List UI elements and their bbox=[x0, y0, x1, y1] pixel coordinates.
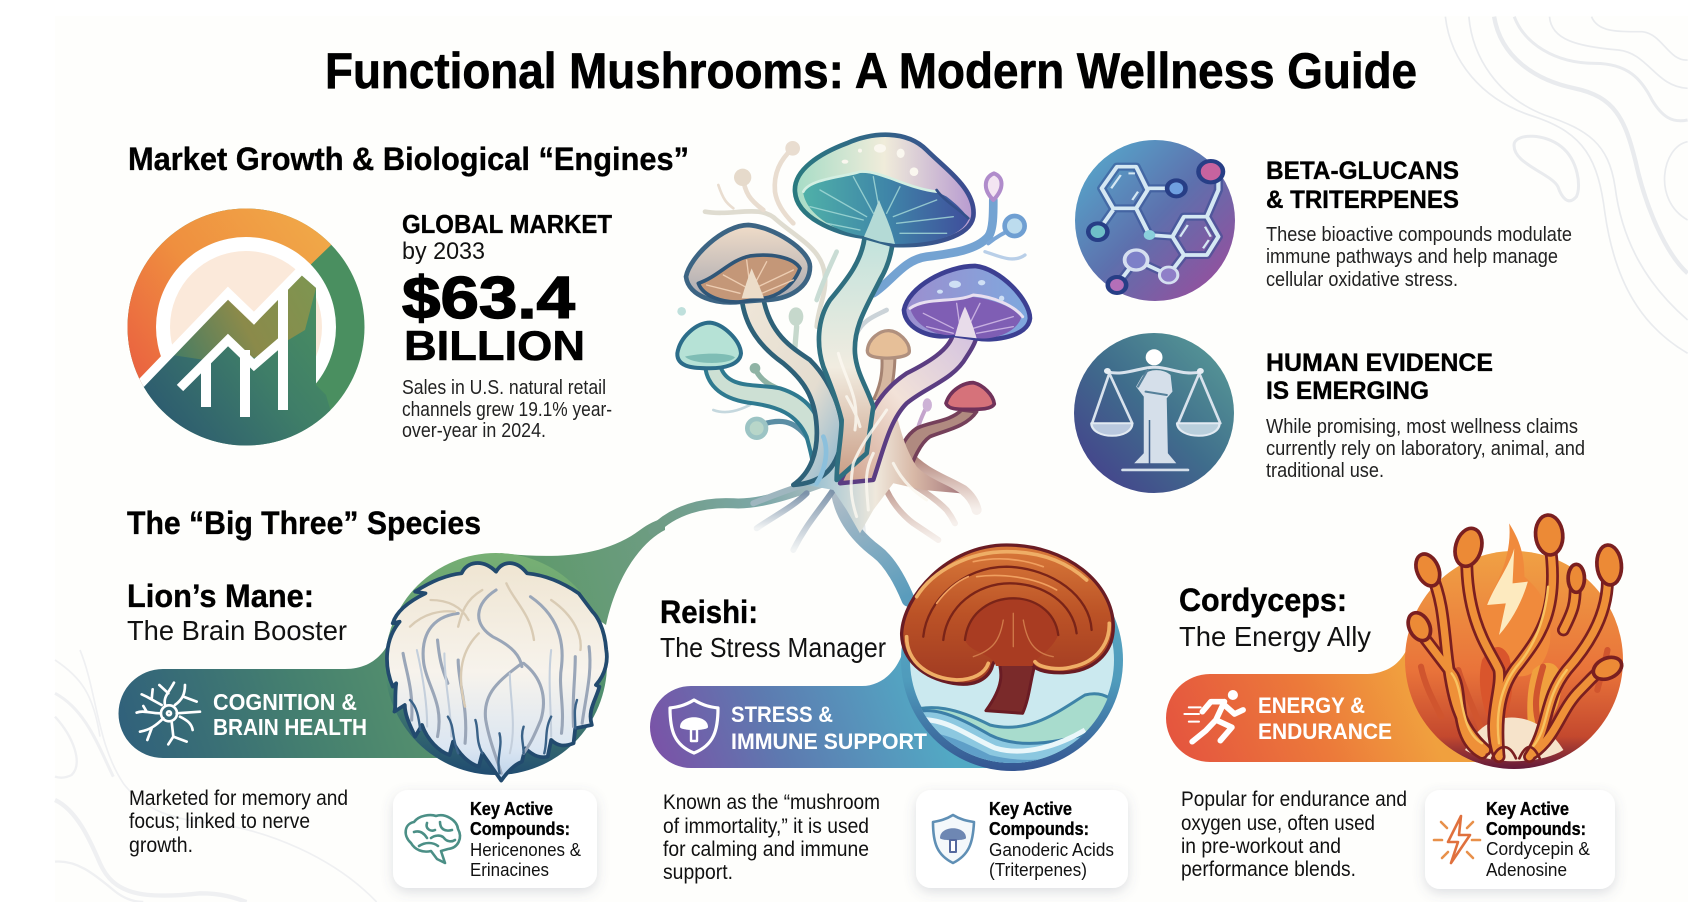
illustration: cordyceps bbox=[1404, 514, 1625, 761]
green root connecting to Lion's Mane bbox=[500, 518, 665, 625]
compounds text bbox=[989, 799, 1114, 880]
description: in pre-workout and bbox=[1181, 835, 1341, 858]
illustration circle bbox=[901, 616, 1123, 771]
stat: global market: by 2033 bbox=[402, 238, 485, 265]
stat: global market bbox=[402, 209, 612, 442]
description: focus; linked to nerve bbox=[129, 810, 310, 833]
root leading to Reishi bbox=[837, 480, 908, 600]
card: key active compounds bbox=[1425, 790, 1615, 889]
description: growth. bbox=[129, 834, 193, 857]
description: of immortality,” it is used bbox=[663, 815, 869, 838]
benefit label: COGNITION & bbox=[213, 689, 357, 715]
purple mushroom bbox=[840, 266, 1030, 483]
small tan mushroom bbox=[867, 331, 909, 403]
compounds text: Erinacines bbox=[470, 860, 549, 880]
text: human evidence: currently rely on laboratory, animal, and bbox=[1266, 438, 1585, 460]
text: beta-glucans: BETA-GLUCANS bbox=[1266, 157, 1459, 185]
benefit label bbox=[731, 702, 928, 754]
icon: neuron bbox=[137, 683, 200, 744]
icon: shield mushroom bbox=[670, 700, 718, 753]
text: human evidence bbox=[1266, 349, 1585, 482]
compounds text: Key Active bbox=[470, 799, 553, 819]
compounds text: Ganoderic Acids bbox=[989, 840, 1114, 860]
species title: The Stress Manager bbox=[660, 632, 886, 663]
description: support. bbox=[663, 861, 733, 884]
icon: scales and thinking person bbox=[1074, 333, 1234, 493]
species title bbox=[127, 578, 347, 646]
icon: brain bbox=[406, 815, 460, 863]
big central mushroom bbox=[795, 135, 974, 480]
stalk heads bbox=[1404, 514, 1625, 684]
species title: Reishi: bbox=[660, 594, 758, 630]
description: Known as the “mushroom bbox=[663, 791, 880, 814]
description: Popular for endurance and bbox=[1181, 788, 1407, 811]
benefit pill bbox=[1166, 640, 1514, 762]
stat: global market: over-year in 2024. bbox=[402, 420, 546, 442]
species title: The Energy Ally bbox=[1179, 621, 1371, 652]
illustration: mushroom tree bbox=[653, 135, 1030, 600]
description bbox=[663, 791, 880, 884]
small branches left bbox=[713, 363, 932, 453]
benefit label bbox=[1258, 693, 1392, 744]
benefit label: BRAIN HEALTH bbox=[213, 714, 367, 740]
compounds text: Cordycepin & bbox=[1486, 839, 1590, 859]
description: performance blends. bbox=[1181, 858, 1356, 881]
trunk and base bbox=[807, 397, 960, 533]
card: key active compounds bbox=[916, 790, 1128, 888]
stat: global market: GLOBAL MARKET bbox=[402, 209, 612, 239]
icon: molecule bbox=[1075, 140, 1235, 301]
benefit label: STRESS & bbox=[731, 702, 833, 727]
benefit pill bbox=[118, 635, 496, 758]
illustration: lion's mane mushroom bbox=[387, 563, 607, 781]
icon: shield bbox=[933, 815, 974, 863]
small red mushroom bbox=[898, 383, 994, 473]
text: beta-glucans: These bioactive compounds modulate bbox=[1266, 224, 1572, 246]
stat: global market: channels grew 19.1% year- bbox=[402, 399, 612, 421]
description: for calming and immune bbox=[663, 838, 869, 861]
text: human evidence: HUMAN EVIDENCE bbox=[1266, 349, 1493, 377]
description bbox=[1181, 788, 1407, 881]
heading: big three: The “Big Three” Species bbox=[127, 505, 481, 541]
compounds text bbox=[1486, 799, 1590, 880]
text: beta-glucans: immune pathways and help manage bbox=[1266, 246, 1558, 268]
text: human evidence: While promising, most wellness claims bbox=[1266, 416, 1578, 438]
species title: Cordyceps: bbox=[1179, 582, 1347, 618]
fine roots bbox=[753, 453, 977, 550]
title: Functional Mushrooms: A Modern Wellness Guide bbox=[325, 43, 1417, 99]
description bbox=[129, 787, 348, 857]
compounds text: Key Active bbox=[989, 799, 1072, 819]
faint tan branches bbox=[705, 141, 887, 347]
blue branch right bbox=[873, 173, 1025, 293]
text: beta-glucans: & TRITERPENES bbox=[1266, 186, 1459, 214]
text: human evidence: IS EMERGING bbox=[1266, 377, 1429, 405]
stat: global market: $63.4 bbox=[402, 265, 575, 331]
card: key active compounds bbox=[393, 790, 597, 888]
compounds text: Hericenones & bbox=[470, 840, 581, 860]
illustration circle bbox=[1405, 551, 1623, 769]
icon: energy bolt bbox=[1434, 816, 1480, 863]
illustration circle bbox=[385, 553, 607, 775]
panel: Cordyceps bbox=[1166, 514, 1625, 889]
icon: market growth chart logo bbox=[128, 208, 364, 446]
compounds text: Compounds: bbox=[1486, 819, 1586, 839]
description: Marketed for memory and bbox=[129, 787, 348, 810]
species title bbox=[660, 594, 886, 663]
icon: runner bbox=[1184, 690, 1243, 742]
panel: Reishi bbox=[650, 545, 1130, 888]
species title: The Brain Booster bbox=[127, 615, 347, 646]
compounds text: Adenosine bbox=[1486, 860, 1567, 880]
stat: global market: BILLION bbox=[404, 322, 585, 369]
heading: market growth: Market Growth & Biological “Engines” bbox=[128, 141, 689, 177]
tan mushroom bbox=[686, 225, 842, 485]
waves bbox=[920, 692, 1108, 763]
benefit label: ENDURANCE bbox=[1258, 719, 1392, 744]
species title: Lion’s Mane: bbox=[127, 578, 314, 614]
trunk highlight strands bbox=[838, 353, 927, 517]
compounds text: Key Active bbox=[1486, 799, 1569, 819]
compounds text: (Triterpenes) bbox=[989, 860, 1087, 880]
long left root bbox=[653, 478, 833, 531]
background contour lines: bottom left bbox=[55, 650, 377, 902]
panel: Lion's Mane bbox=[118, 553, 607, 888]
stat: global market: Sales in U.S. natural retail bbox=[402, 377, 606, 399]
text: beta-glucans: cellular oxidative stress. bbox=[1266, 269, 1458, 291]
illustration: reishi mushroom bbox=[902, 545, 1113, 713]
compounds text: Compounds: bbox=[989, 819, 1089, 839]
compounds text: Compounds: bbox=[470, 819, 570, 839]
background contour lines: top right bbox=[1445, 17, 1688, 353]
benefit pill bbox=[650, 640, 1012, 768]
stalks bbox=[1421, 543, 1611, 757]
benefit label bbox=[213, 689, 367, 740]
description: oxygen use, often used bbox=[1181, 812, 1375, 835]
benefit label: ENERGY & bbox=[1258, 693, 1365, 718]
small teal mushroom bbox=[677, 323, 823, 473]
text: beta-glucans bbox=[1266, 157, 1572, 291]
compounds text bbox=[470, 799, 581, 880]
text: human evidence: traditional use. bbox=[1266, 460, 1384, 482]
species title bbox=[1179, 582, 1371, 652]
benefit label: IMMUNE SUPPORT bbox=[731, 729, 928, 754]
